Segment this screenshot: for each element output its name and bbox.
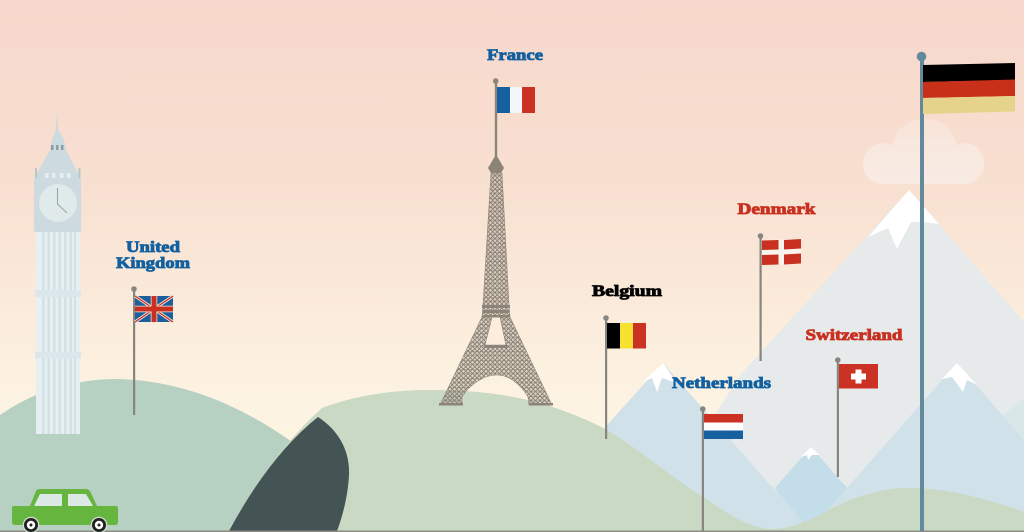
label: Netherlands: Netherlands — [672, 375, 771, 392]
France pole — [493, 78, 499, 160]
lattice crosshatch — [440, 173, 552, 405]
tower corner finials — [35, 168, 80, 178]
Denmark flag cloth — [762, 239, 801, 265]
car front wheel — [91, 517, 107, 532]
label: Switzerland: Switzerland — [806, 327, 903, 344]
label: United Kingdom: Kingdom — [116, 255, 191, 272]
car rear wheel — [23, 517, 39, 532]
left green hill — [0, 379, 300, 532]
right blue mountain — [800, 363, 1024, 532]
Germany flag cloth — [923, 63, 1015, 114]
Denmark pole — [758, 233, 763, 361]
France flag cloth — [497, 87, 535, 113]
snow cap: large mountain — [868, 190, 939, 249]
car windows — [34, 494, 93, 506]
green car — [12, 489, 118, 532]
Switzerland pole — [835, 357, 841, 477]
label: Belgium: Belgium — [592, 283, 663, 300]
Germany pole — [917, 52, 926, 531]
Switzerland flag cloth — [839, 364, 878, 388]
France flag — [493, 78, 535, 160]
Belgium pole — [603, 315, 609, 439]
snow cap: right mountain — [942, 363, 977, 392]
Netherlands flag — [700, 406, 743, 531]
Netherlands flag cloth — [704, 414, 743, 439]
Belgium flag — [603, 315, 646, 439]
shaft stripes — [42, 232, 76, 434]
dark tunnel shape — [229, 417, 349, 531]
Big Ben tower — [34, 111, 81, 434]
small blue mountain — [775, 447, 847, 522]
UK flag cloth — [135, 296, 173, 322]
Switzerland flag — [835, 357, 878, 477]
clock block — [34, 178, 81, 232]
UK flag — [131, 286, 173, 415]
left blue mountain — [600, 363, 830, 532]
tower decks and cap — [439, 157, 553, 406]
centre and right green hill — [228, 390, 1024, 532]
tower lattice — [440, 173, 552, 405]
tower shaft — [36, 232, 80, 434]
car body — [12, 489, 118, 525]
Netherlands pole — [700, 406, 706, 531]
Eiffel Tower — [439, 157, 553, 406]
tower small windows — [45, 173, 70, 178]
label: United Kingdom: United — [126, 239, 180, 256]
Germany flag — [917, 52, 1015, 531]
Belgium flag cloth — [607, 323, 646, 348]
far right mountain — [1003, 398, 1024, 532]
tower lantern windows — [51, 145, 64, 150]
tower bands — [35, 290, 81, 358]
tower spire and roof — [35, 111, 80, 180]
snow cap: left mountain — [643, 363, 677, 392]
label: France: France — [487, 47, 543, 64]
label: Denmark: Denmark — [738, 201, 816, 218]
UK pole — [131, 286, 137, 415]
ground line — [0, 530, 1024, 532]
large grey mountain — [640, 190, 1024, 532]
clock face — [39, 184, 77, 222]
cloud — [863, 119, 984, 184]
label: United Kingdom — [116, 239, 191, 272]
snow cap: small mountain — [801, 447, 819, 460]
Denmark flag — [758, 233, 801, 361]
